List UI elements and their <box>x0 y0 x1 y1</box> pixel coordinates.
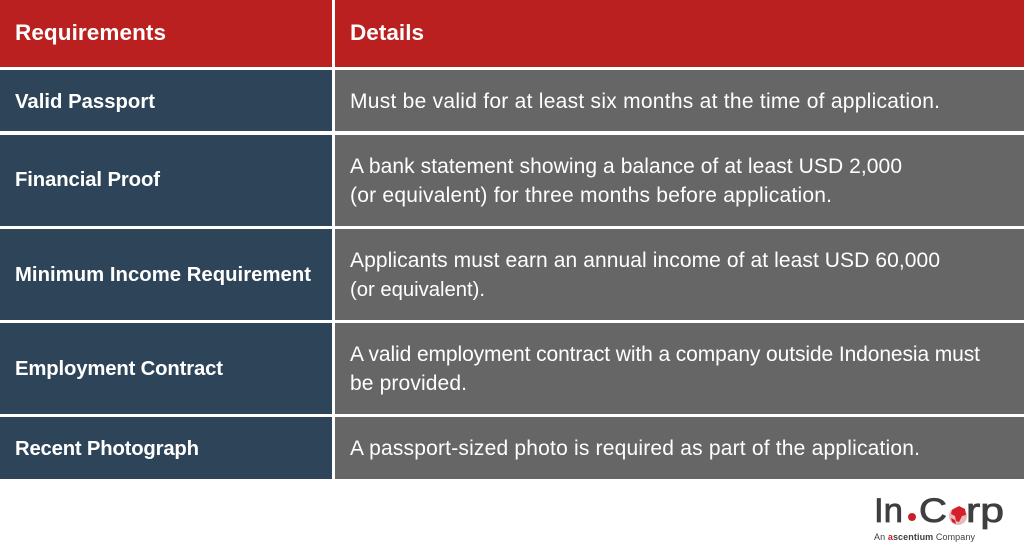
row label: financial proof <box>0 135 332 226</box>
row detail: financial proof: A bank statement showing a balance of at least USD 2,000 <box>350 155 902 178</box>
row label: employment contract: Employment Contract <box>15 358 223 380</box>
logo: InCorp: rp <box>966 492 1004 530</box>
row label: recent photograph <box>0 417 332 479</box>
logo: InCorp: C <box>919 492 947 530</box>
table header: requirements <box>0 0 332 67</box>
row label: financial proof: Financial Proof <box>15 169 160 191</box>
row label: employment contract <box>0 323 332 414</box>
row detail: financial proof <box>335 135 1024 226</box>
table header: details <box>335 0 1024 67</box>
logo: InCorp <box>874 492 1004 542</box>
row detail: recent photograph <box>335 417 1024 479</box>
logo: InCorp: An ascentium Company <box>874 532 976 542</box>
row label: valid passport: Valid Passport <box>15 91 155 113</box>
row detail: minimum income requirement <box>335 229 1024 320</box>
row detail: employment contract: A valid employment contract with a company outside Indonesia must <box>350 343 980 366</box>
icon: globe <box>949 506 967 525</box>
row label: valid passport <box>0 70 332 131</box>
row detail: minimum income requirement: Applicants must earn an annual income of at least USD 60,000 <box>350 249 940 272</box>
row label: minimum income requirement <box>0 229 332 320</box>
row detail: valid passport <box>335 70 1024 131</box>
row detail: minimum income requirement: (or equivalent). <box>350 279 485 301</box>
row detail: employment contract: be provided. <box>350 372 467 395</box>
table header: requirements: Requirements <box>15 20 166 45</box>
row detail: recent photograph: A passport-sized photo is required as part of the application. <box>350 437 920 460</box>
logo: InCorp: In <box>874 492 903 530</box>
row detail: employment contract <box>335 323 1024 414</box>
row label: recent photograph: Recent Photograph <box>15 438 199 460</box>
row label: minimum income requirement: Minimum Income Requirement <box>15 264 311 286</box>
row detail: valid passport: Must be valid for at least six months at the time of application. <box>350 90 940 113</box>
table header: details: Details <box>350 20 424 45</box>
row detail: financial proof: (or equivalent) for three months before application. <box>350 184 832 207</box>
